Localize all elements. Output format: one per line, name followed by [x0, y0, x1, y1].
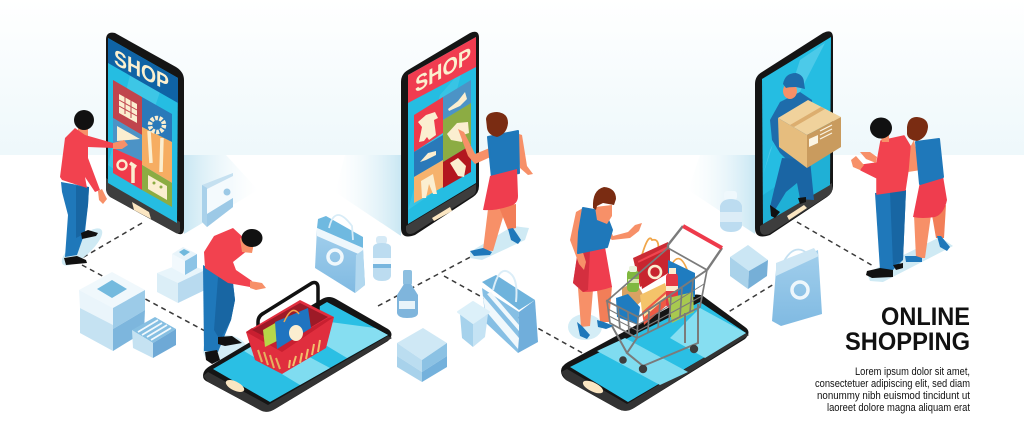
person: man tapping phone 1 [57, 110, 128, 271]
phone 1 heading: SHOP [114, 44, 169, 96]
box: cosmetic package [202, 173, 233, 227]
cart handle [683, 226, 722, 248]
dashed connector lines [82, 222, 875, 355]
cup container [458, 302, 489, 347]
person: woman with cart [570, 187, 642, 339]
man [851, 118, 910, 278]
background band [0, 0, 1024, 155]
title: online shopping: ONLINE [881, 303, 970, 331]
box: large white gift box [79, 272, 145, 351]
woman [905, 117, 950, 262]
phone 4 lying flat with basket [203, 283, 392, 412]
box: striped lid box [132, 317, 176, 358]
decorative boxes and products [79, 173, 822, 382]
box: stacked cubes [157, 247, 205, 303]
box: blue cube [397, 328, 447, 382]
cart goods [616, 238, 695, 325]
bottle 1 [373, 236, 391, 281]
phone 1: tools shop [106, 33, 184, 234]
delivery courier [770, 73, 841, 218]
phone shadows [184, 155, 755, 236]
phone 1 home button [132, 202, 151, 219]
shopping basket [246, 283, 334, 374]
shopping bag 2 [482, 271, 538, 353]
couple watching delivery [851, 117, 953, 282]
title: online shopping: SHOPPING [845, 328, 970, 356]
phone 1 product tiles [113, 80, 172, 207]
parcel box [778, 100, 841, 168]
description text: Lorem ipsum dolor sit amet, [855, 366, 970, 378]
person: woman touching phone 2 [458, 112, 533, 260]
phone 2 heading: SHOP [415, 43, 471, 99]
phone 4 home button [224, 378, 246, 394]
cart wheels [619, 345, 698, 373]
cart frame [607, 226, 722, 366]
description text [815, 366, 970, 414]
description text: nonummy nibh euismod tincidunt ut [817, 390, 970, 402]
phone 3: delivery [755, 31, 841, 236]
shopping cart [607, 226, 722, 373]
phone 3 home button [787, 205, 807, 220]
bottle 2 [397, 270, 418, 318]
shopping bag 3 [772, 248, 822, 326]
phone 2 product tiles [414, 80, 471, 203]
description text: laoreet dolore magna aliquam erat [827, 402, 970, 414]
title: online shopping [845, 303, 970, 356]
box: cube near bag 3 [730, 245, 768, 289]
foot shadows [203, 314, 602, 365]
phone 2: clothes shop [401, 32, 479, 236]
phone 5 home button [581, 378, 605, 396]
phone 5 lying flat with cart [561, 294, 749, 411]
person: man pointing at basket [203, 228, 266, 364]
phone 2 home button [432, 207, 452, 221]
bottle 3 [720, 191, 742, 232]
shopping bag 1 [315, 215, 365, 293]
description text: consectetuer adipiscing elit, sed diam [815, 378, 970, 390]
